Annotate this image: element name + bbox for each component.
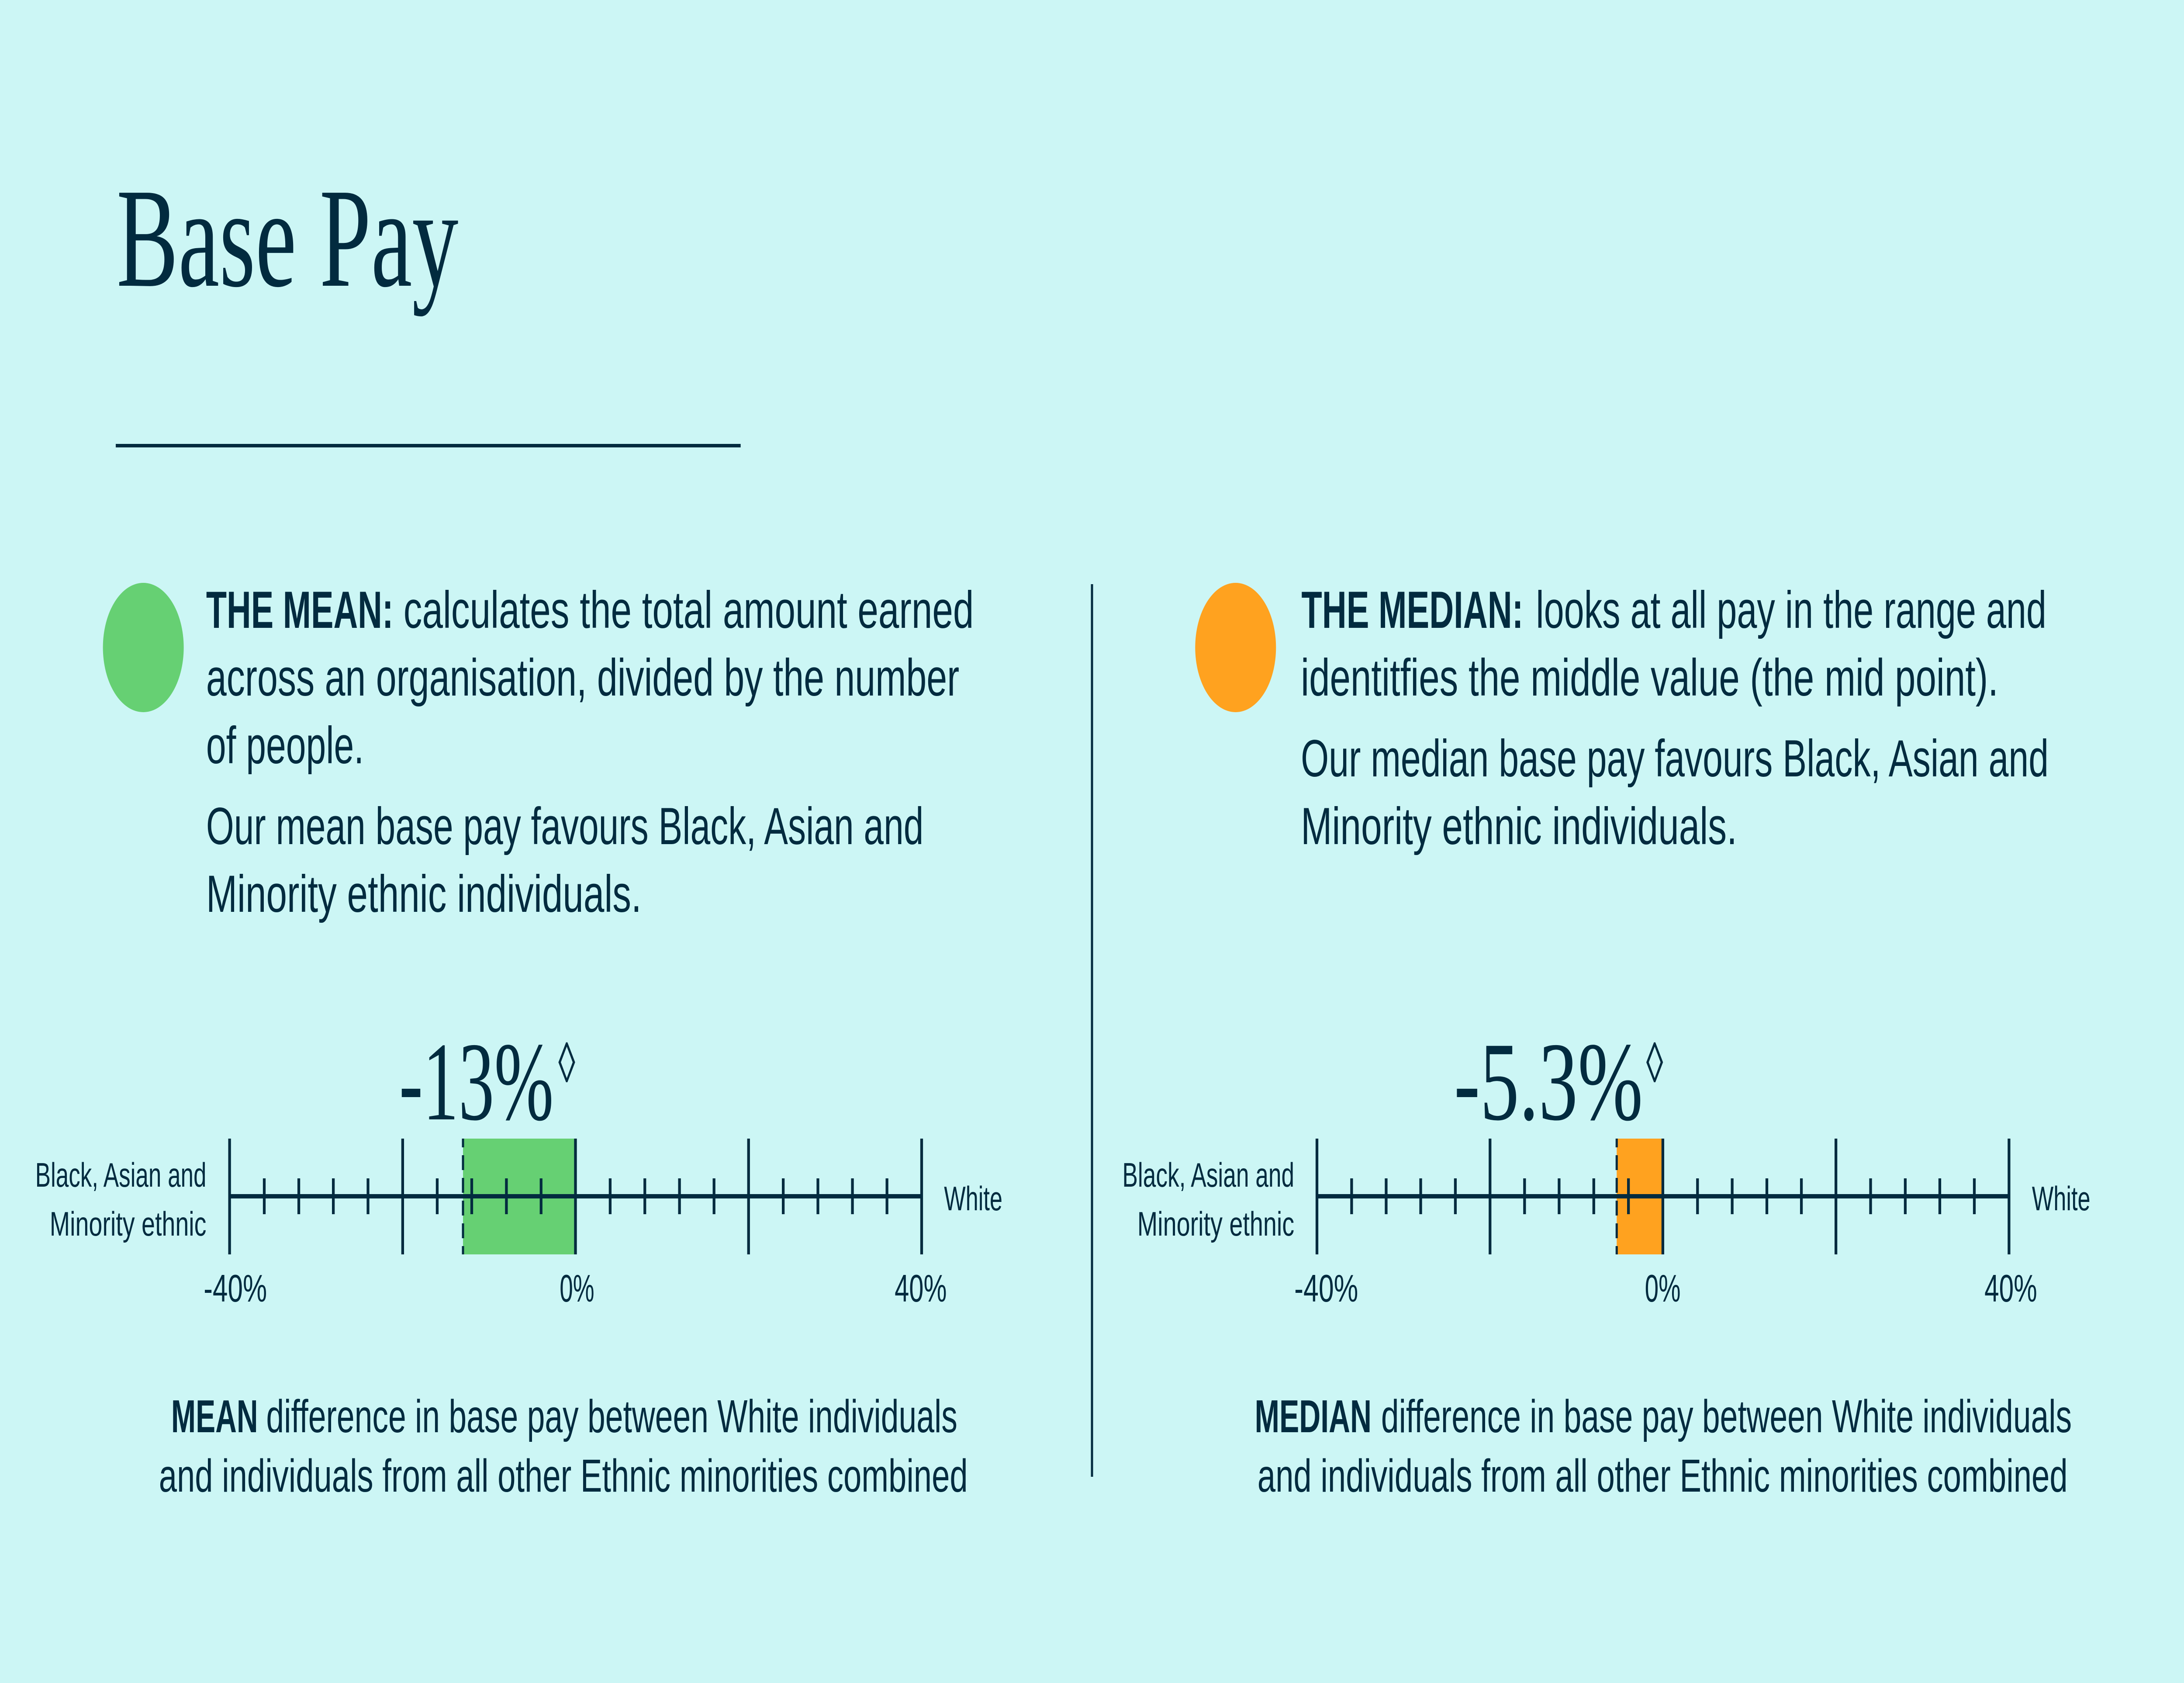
text block: median definition: identitfies the middle value (the mid point). [1301,648,1998,707]
text block: median definition: Minority ethnic individuals. [1301,797,1737,855]
left axis label: Black, Asian and [35,1156,207,1194]
text block: median definition: Our median base pay favours Black, Asian and [1301,729,2049,788]
caption: median: and individuals from all other Ethnic minorities combined [1258,1450,2068,1502]
axis value labels: 0% [560,1267,594,1310]
text block: mean definition [206,581,974,923]
left axis label: Minority ethnic [1137,1205,1294,1243]
title: Base Pay [117,159,458,317]
dashed marker at -13% [461,1139,465,1254]
dashed marker at -5.3% [1615,1139,1618,1254]
axis line and ticks [1317,1139,2009,1254]
left axis label [1122,1156,1294,1243]
text block: median definition: THE MEDIAN: [1301,581,1523,639]
text block: median definition [1301,581,2049,855]
axis value labels [204,1267,947,1310]
axis value labels: 40% [1984,1267,2037,1310]
axis line and ticks [230,1139,922,1254]
caption: mean: MEAN [171,1390,258,1442]
mean value: -13% [399,1020,553,1144]
caption: mean: and individuals from all other Ethnic minorities combined [159,1450,968,1502]
caption: median [1254,1390,2072,1502]
chart: median difference scale [1122,1139,2091,1310]
title underline rule [116,444,741,447]
chart: mean difference scale [35,1139,1002,1310]
vertical divider [1091,584,1093,1477]
caption: mean [159,1390,968,1502]
caption: median: MEDIAN [1254,1390,1372,1442]
median value: ◊ [1646,1032,1663,1095]
bar: mean value [463,1139,576,1254]
axis value labels: -40% [204,1267,267,1310]
axis value labels: 40% [895,1267,947,1310]
icon: green mean circle [103,583,184,712]
icon: orange median circle [1195,583,1276,712]
text block: mean definition: of people. [206,716,364,775]
text block: mean definition: across an organisation, divided by the number [206,648,959,707]
text block: mean definition: calculates the total amount earned [404,581,974,639]
right axis label: White [2032,1179,2091,1218]
median value: -5.3% [1454,1020,1643,1144]
axis value labels: -40% [1294,1267,1358,1310]
text block: mean definition: Our mean base pay favours Black, Asian and [206,797,923,855]
left axis label: Minority ethnic [50,1205,206,1243]
left axis label [35,1156,207,1243]
panel: the mean [35,581,1002,1502]
axis value labels: 0% [1645,1267,1681,1310]
bar: median value [1617,1139,1663,1254]
axis value labels [1294,1267,2037,1310]
text block: mean definition: Minority ethnic individuals. [206,865,642,923]
panel: the median [1122,581,2091,1502]
text block: mean definition: THE MEAN: [206,581,394,639]
caption: median: difference in base pay between White individuals [1381,1390,2072,1442]
right axis label: White [944,1179,1002,1218]
caption: mean: difference in base pay between White individuals [266,1390,957,1442]
mean value: ◊ [558,1032,575,1095]
text block: median definition: looks at all pay in the range and [1536,581,2046,639]
left axis label: Black, Asian and [1122,1156,1294,1194]
